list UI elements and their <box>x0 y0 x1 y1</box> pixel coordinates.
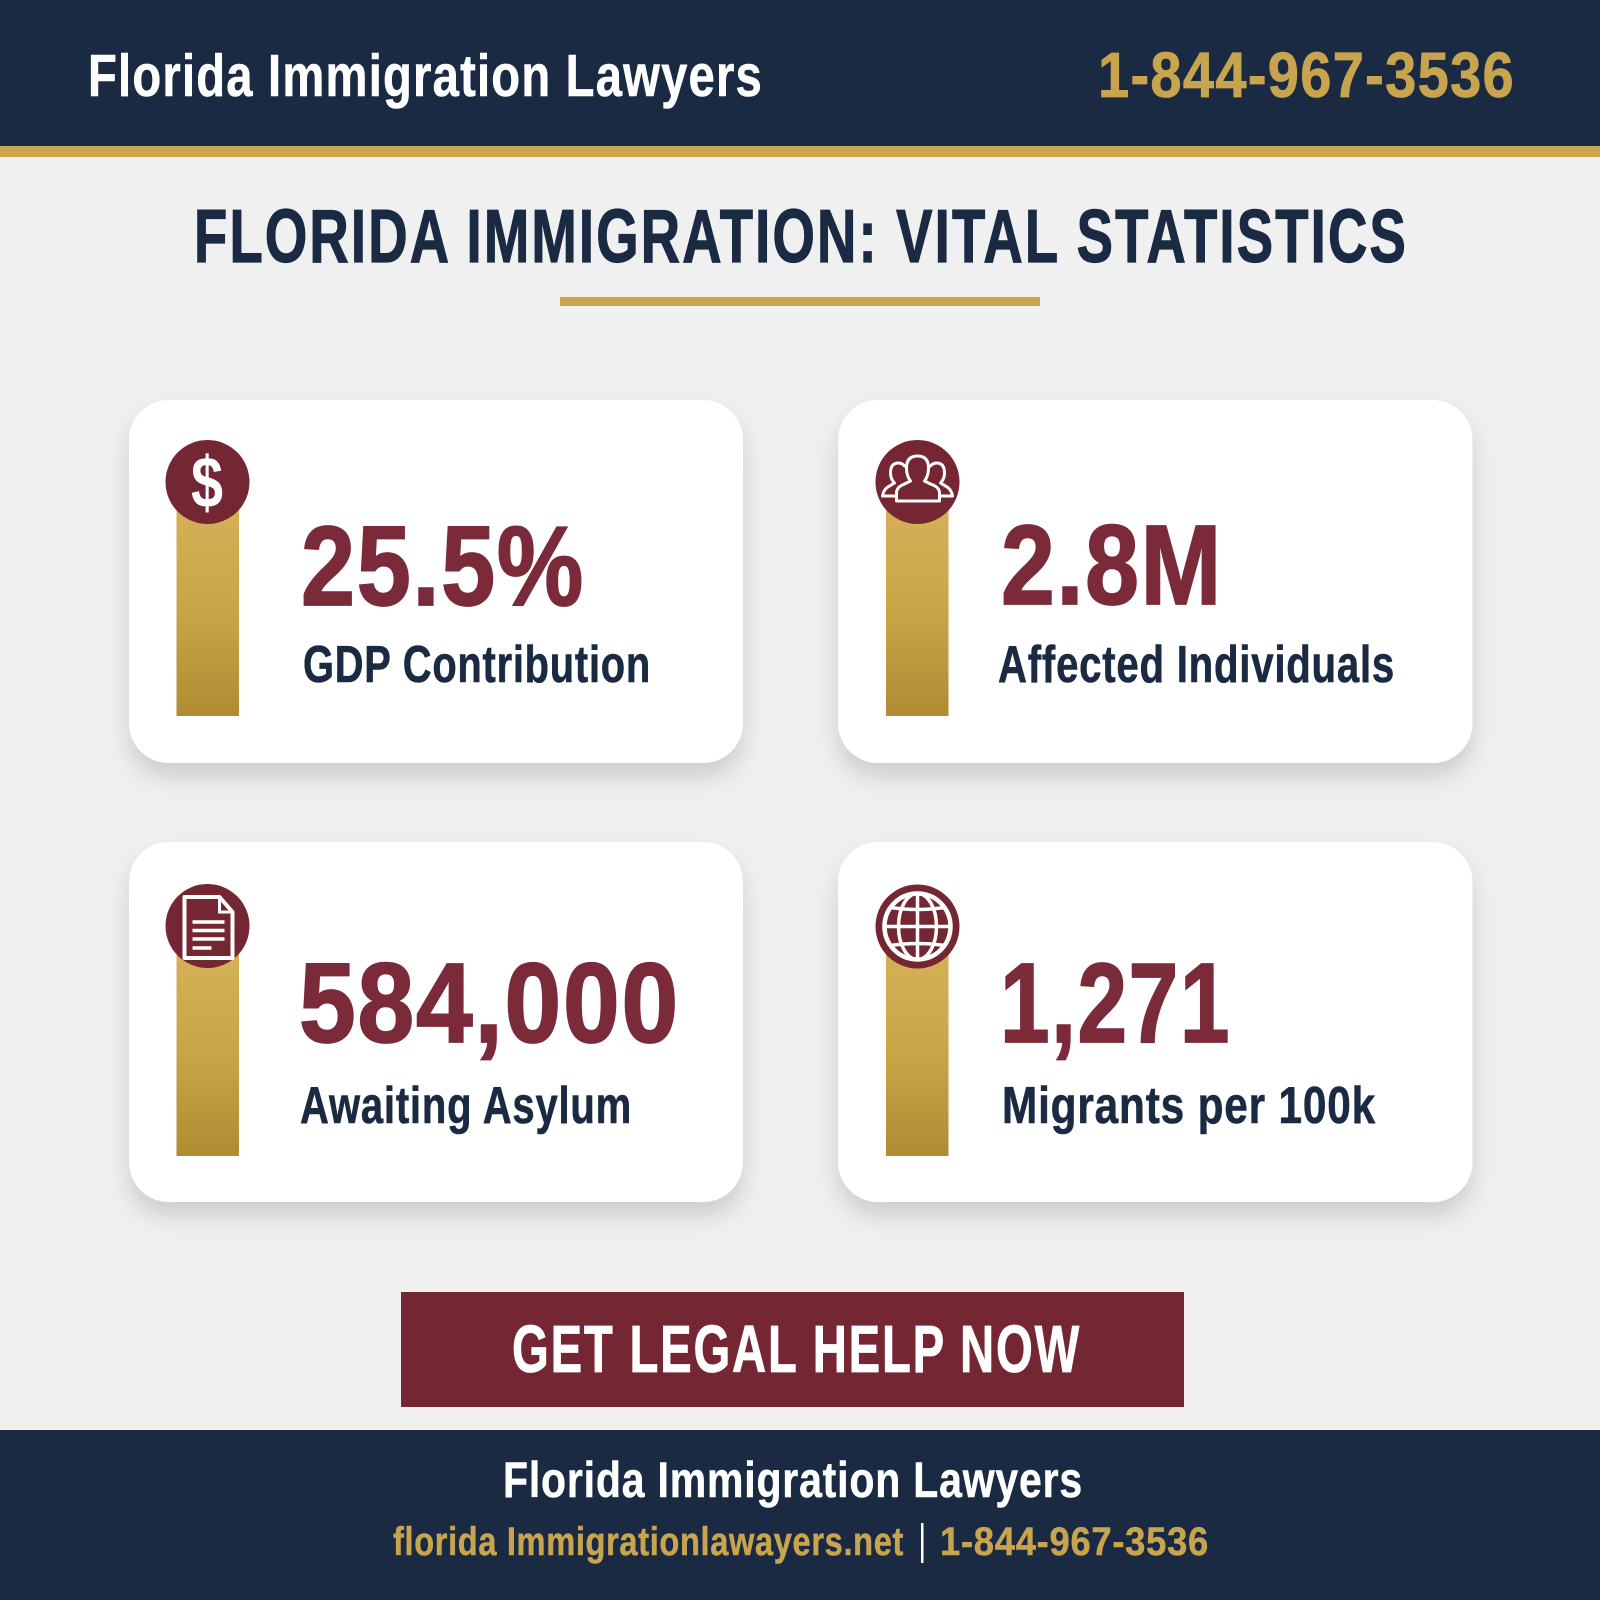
panel: migrants per 100k <box>838 842 1472 1202</box>
header phone number: 1-844-967-3536 <box>1098 39 1515 111</box>
panel: GDP contribution <box>129 400 743 763</box>
footer phone number: 1-844-967-3536 <box>940 1520 1209 1564</box>
stat value: 1,271 <box>1000 940 1231 1066</box>
gold bar <box>176 945 239 1156</box>
stat label: Awaiting Asylum <box>300 1077 632 1135</box>
icon: document <box>166 884 250 968</box>
footer separator <box>921 1523 924 1563</box>
icon: globe <box>876 884 960 968</box>
footer firm name: Florida Immigration Lawyers <box>503 1452 1083 1508</box>
stat label: Migrants per 100k <box>1002 1077 1376 1135</box>
title underline <box>560 297 1040 306</box>
stat label: Affected Individuals <box>998 636 1395 694</box>
stat value: 584,000 <box>299 940 680 1066</box>
gold bar <box>176 500 239 716</box>
call to action button <box>401 1292 1184 1407</box>
footer website: florida Immigrationlawayers.net <box>393 1520 904 1564</box>
gold bar <box>886 500 948 716</box>
call to action button: GET LEGAL HELP NOW <box>512 1312 1081 1387</box>
stat value: 25.5% <box>301 503 585 629</box>
icon: dollar sign: $ <box>191 443 223 523</box>
panel: affected individuals <box>838 400 1472 763</box>
icon: group of people <box>876 440 960 524</box>
stat label: GDP Contribution <box>303 636 651 694</box>
header band <box>0 0 1600 157</box>
panel: awaiting asylum <box>129 842 743 1202</box>
icon: dollar sign <box>166 440 250 524</box>
gold bar <box>886 945 948 1156</box>
stat value: 2.8M <box>1001 502 1223 628</box>
footer band <box>0 1430 1600 1600</box>
header firm name: Florida Immigration Lawyers <box>88 43 763 109</box>
